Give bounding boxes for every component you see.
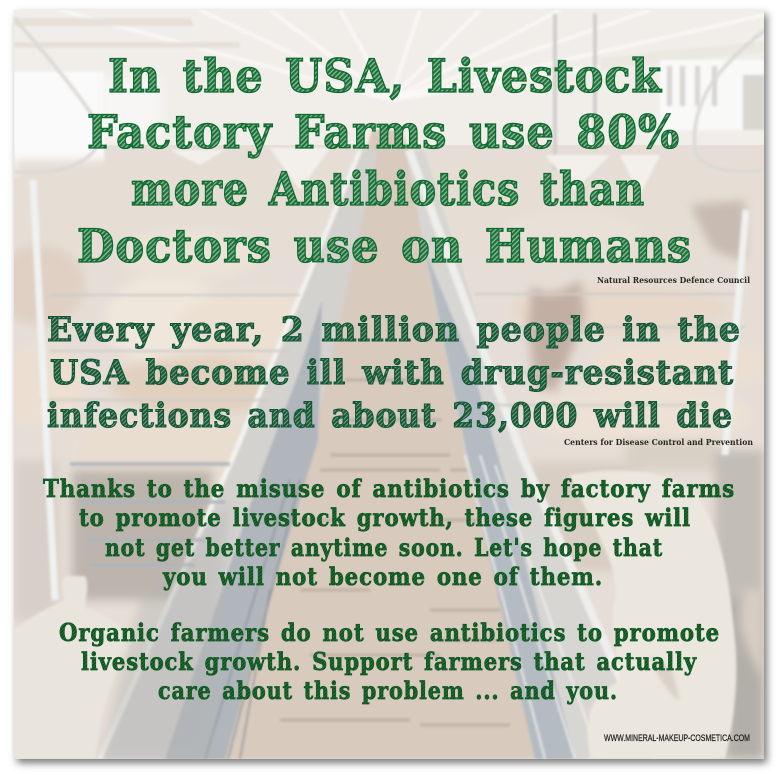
lower sides bbox=[14, 440, 764, 759]
misuse line 2: to promote livestock growth, these figures will bbox=[79, 503, 691, 532]
statistic line 2: USA become ill with drug-resistant bbox=[50, 353, 734, 393]
headline line 1: In the USA, Livestock bbox=[108, 49, 662, 103]
organic line 3: care about this problem ... and you. bbox=[158, 676, 618, 705]
stalls middle band bbox=[14, 156, 105, 178]
pen rails horizontal bbox=[40, 294, 745, 405]
paragraph: misuse of antibiotics bbox=[43, 474, 735, 591]
source credit: NRDC: Natural Resources Defence Council bbox=[597, 275, 750, 285]
overhead curved pipes bbox=[14, 14, 765, 173]
headline line 3: more Antibiotics than bbox=[131, 162, 645, 216]
statistic line 3: infections and about 23,000 will die bbox=[47, 396, 733, 436]
misuse line 3: not get better anytime soon. Let's hope that bbox=[105, 533, 663, 562]
left blue rail bbox=[100, 150, 378, 759]
source credit: CDC: Centers for Disease Control and Prevention bbox=[564, 437, 753, 447]
dark pig face bbox=[528, 280, 585, 392]
paragraph: organic farmers bbox=[59, 618, 720, 705]
white pig bottom left bbox=[23, 575, 88, 626]
bottom-left shade bbox=[100, 500, 230, 759]
right white rail bar bbox=[405, 149, 620, 681]
left white rail bar bbox=[100, 150, 360, 759]
organic line 2: livestock growth. Support farmers that actually bbox=[81, 647, 697, 676]
centre aisle bbox=[224, 129, 536, 759]
headline line 2: Factory Farms use 80% bbox=[87, 105, 680, 159]
misuse line 4: you will not become one of them. bbox=[162, 562, 603, 591]
white posts bbox=[33, 180, 746, 600]
ceiling bbox=[14, 10, 765, 177]
statistic line 1: Every year, 2 million people in the bbox=[47, 310, 741, 350]
panel: headline bbox=[77, 49, 692, 273]
white pig bottom right bbox=[570, 470, 736, 759]
pigs left bbox=[14, 245, 268, 420]
panel: illness statistic bbox=[47, 310, 741, 436]
feed hoppers bbox=[170, 148, 660, 195]
pigs right bbox=[515, 197, 748, 334]
right blue rail bbox=[406, 150, 616, 758]
headline line 4: Doctors use on Humans bbox=[77, 219, 692, 273]
